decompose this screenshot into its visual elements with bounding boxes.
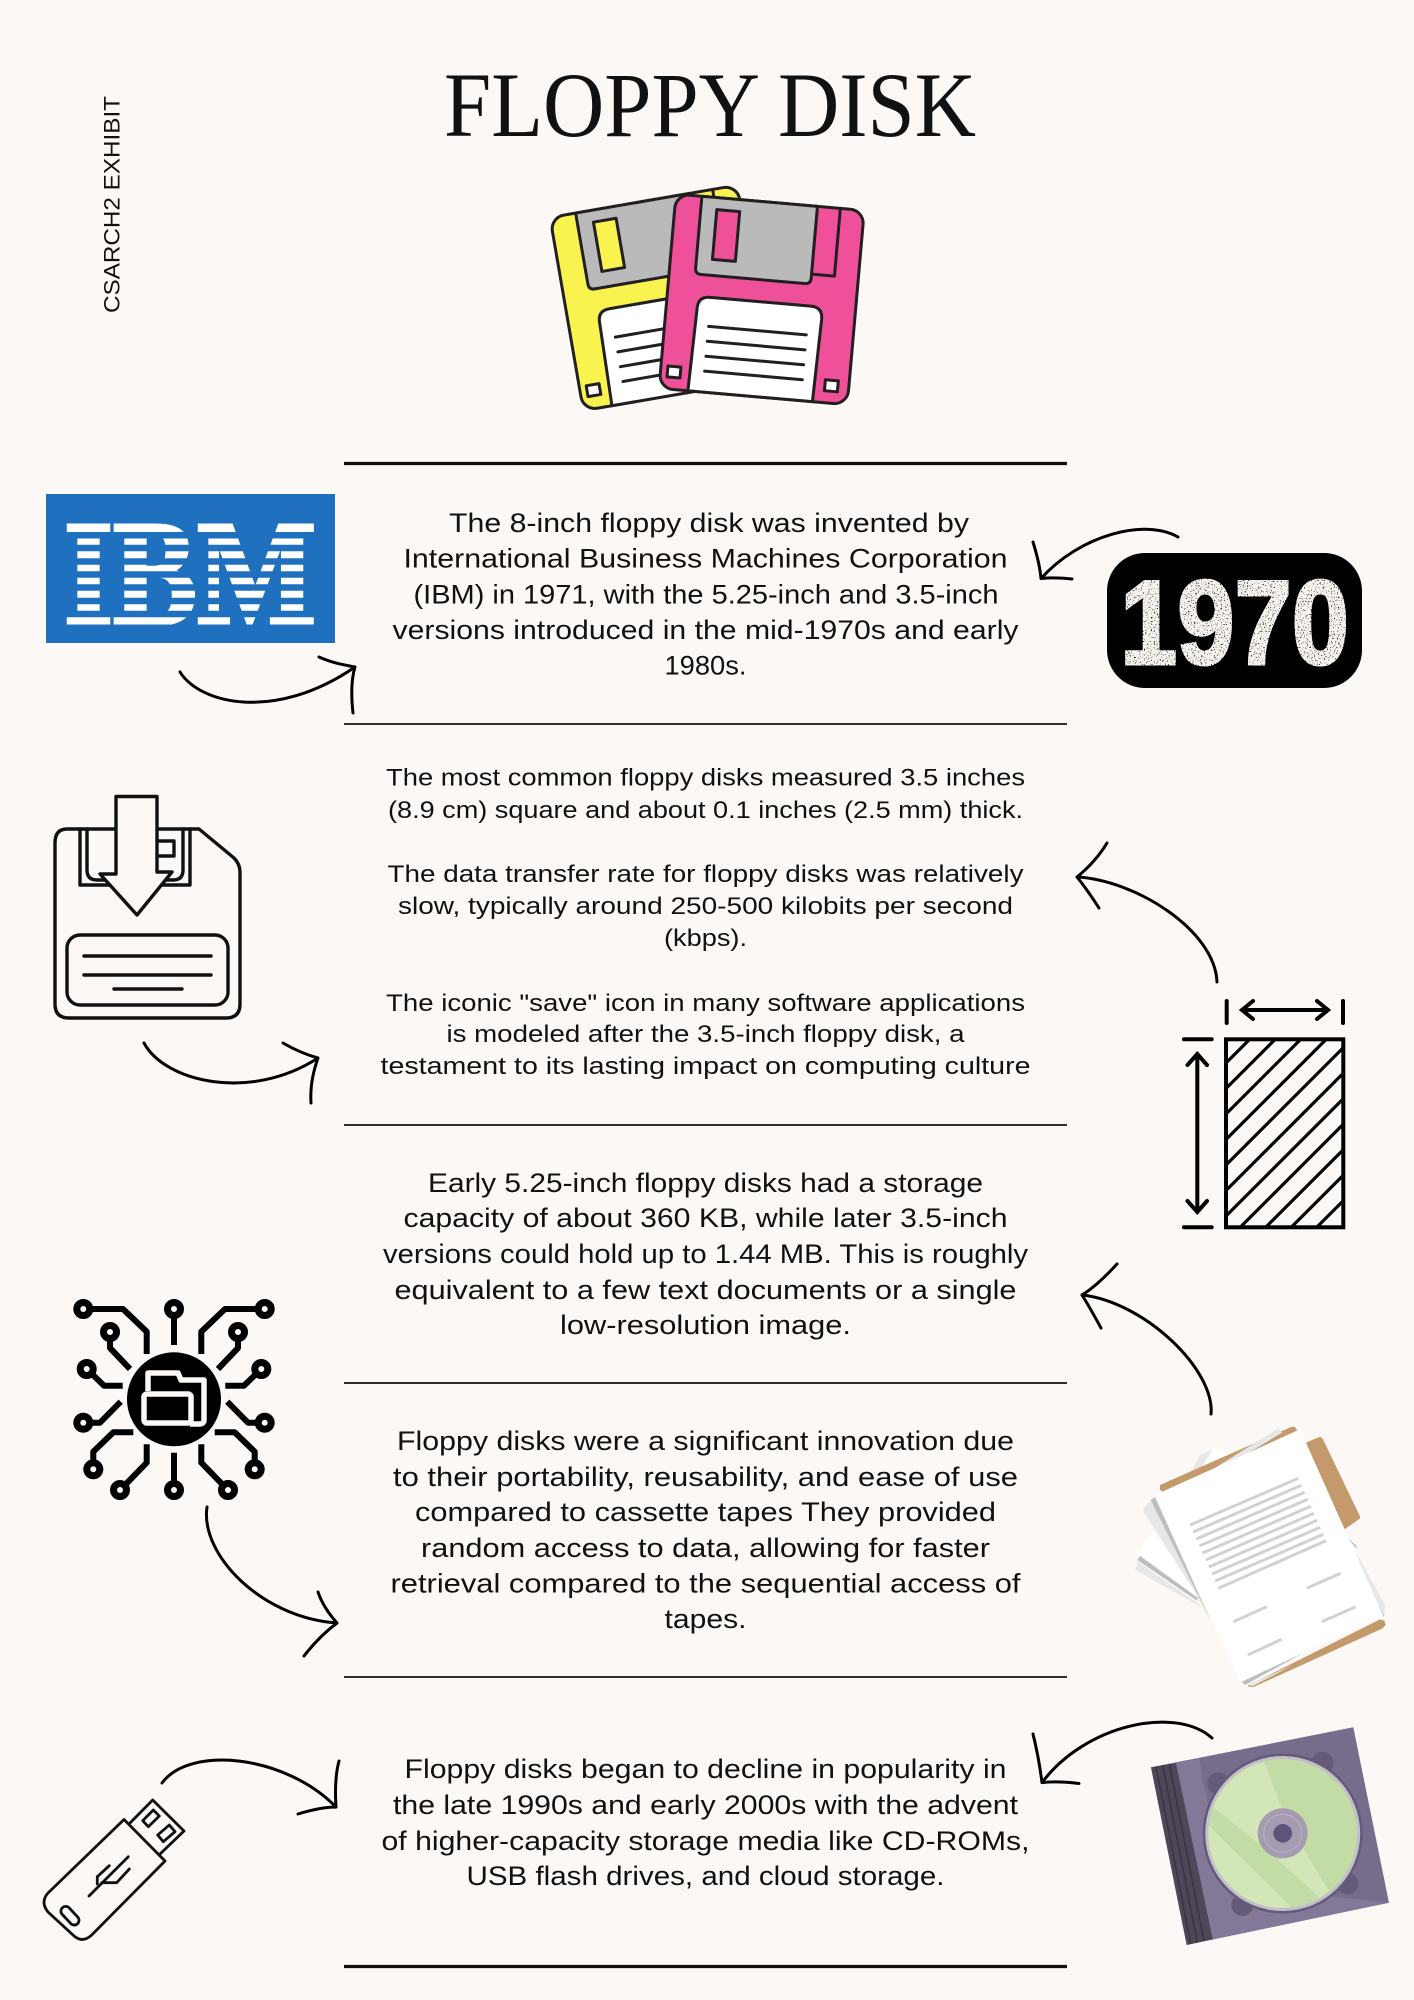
icon: yellow floppy disk — [550, 185, 771, 411]
icon: pink floppy disk — [659, 194, 864, 405]
icon: save floppy with download arrow — [55, 796, 240, 1018]
text block: innovation: retrieval compared to the sequential access of — [390, 1568, 1021, 1598]
text block: storage capacity — [383, 1168, 1029, 1340]
text block: decline: of higher-capacity storage media like CD-ROMs, — [382, 1826, 1030, 1856]
arrow: IBM to first text block — [180, 657, 355, 713]
icon: stack of documents in folder — [1135, 1427, 1385, 1686]
text block: storage capacity: Early 5.25-inch floppy disks had a storage — [428, 1168, 983, 1198]
text block: innovation: Floppy disks were a significant innovation due — [397, 1426, 1014, 1456]
text block: dimensions, transfer rate and save icon: The data transfer rate for floppy disks was relatively — [388, 861, 1024, 888]
icon: dimensions hatched square — [1182, 998, 1346, 1230]
text block: storage capacity: low-resolution image. — [560, 1310, 851, 1340]
badge: 1970: 1970 — [1120, 556, 1349, 690]
text block: dimensions, transfer rate and save icon: The iconic "save" icon in many software applications — [386, 990, 1025, 1017]
text block: invention: versions introduced in the mid-1970s and early — [392, 615, 1019, 645]
arrow: network icon to fourth text block — [206, 1507, 337, 1656]
text block: innovation — [390, 1426, 1021, 1634]
arrow: save icon to second text block — [144, 1043, 318, 1103]
text block: invention — [392, 508, 1019, 680]
text block: invention: The 8-inch floppy disk was invented by — [449, 508, 970, 538]
text block: storage capacity: versions could hold up to 1.44 MB. This is roughly — [383, 1239, 1029, 1269]
icon: yellow and pink floppy disks — [550, 185, 864, 411]
icon: circuit network with folder — [77, 1302, 271, 1496]
text block: dimensions, transfer rate and save icon: testament to its lasting impact on computing culture — [380, 1053, 1030, 1080]
text block: innovation: tapes. — [664, 1604, 746, 1634]
text block: innovation: to their portability, reusability, and ease of use — [393, 1462, 1018, 1492]
icon: USB flash drive — [44, 1800, 184, 1940]
text block: dimensions, transfer rate and save icon: The most common floppy disks measured 3.5 inches — [386, 764, 1025, 792]
divider rules — [344, 464, 1067, 1966]
arrow: size icon to second text block — [1077, 843, 1217, 982]
text block: decline: Floppy disks began to decline in popularity in — [404, 1754, 1006, 1784]
arrow: 1970 to first text block — [1033, 529, 1178, 579]
text block: innovation: random access to data, allowing for faster — [421, 1533, 990, 1563]
text block: dimensions, transfer rate and save icon: (8.9 cm) square and about 0.1 inches (2.5 mm) thick. — [388, 797, 1023, 824]
text block: dimensions, transfer rate and save icon — [380, 764, 1030, 1080]
text block: dimensions, transfer rate and save icon: (kbps). — [664, 925, 747, 952]
text block: dimensions, transfer rate and save icon: slow, typically around 250-500 kilobits per second — [398, 893, 1013, 920]
text block: decline: the late 1990s and early 2000s with the advent — [393, 1790, 1019, 1820]
text block: innovation: compared to cassette tapes They provided — [415, 1497, 996, 1527]
text block: dimensions, transfer rate and save icon: is modeled after the 3.5-inch floppy disk, a — [446, 1021, 965, 1048]
arrow: CD to fifth text block — [1033, 1722, 1212, 1784]
title: FLOPPY DISK — [444, 54, 976, 156]
icon: IBM logo: IBM — [64, 490, 316, 656]
text block: storage capacity: equivalent to a few text documents or a single — [394, 1275, 1016, 1305]
text block: invention: (IBM) in 1971, with the 5.25-inch and 3.5-inch — [414, 580, 998, 610]
text block: invention: 1980s. — [664, 650, 746, 680]
icon: CD in jewel case — [1151, 1727, 1389, 1945]
text block: storage capacity: capacity of about 360 KB, while later 3.5-inch — [404, 1203, 1008, 1233]
text block: decline: USB flash drives, and cloud storage. — [466, 1861, 944, 1891]
text block: decline — [382, 1754, 1030, 1891]
side label: CSARCH2 EXHIBIT: CSARCH2 EXHIBIT — [100, 96, 124, 313]
text block: invention: International Business Machines Corporation — [404, 544, 1008, 574]
arrow: documents to third text block — [1082, 1264, 1211, 1414]
arrow: USB drive to fifth text block — [162, 1760, 339, 1814]
